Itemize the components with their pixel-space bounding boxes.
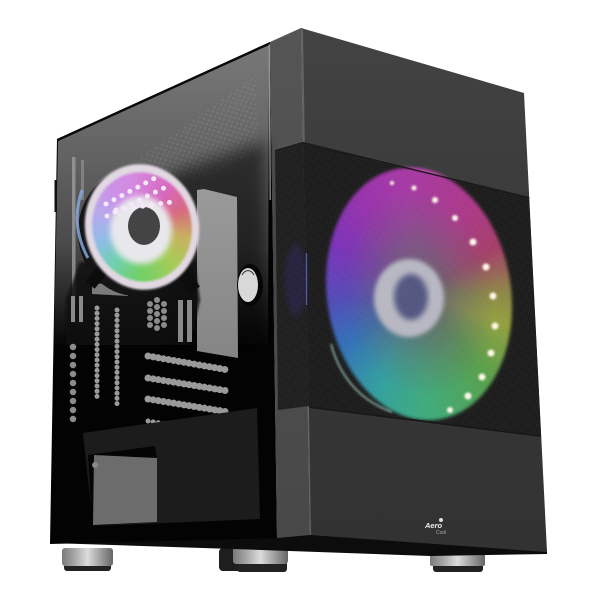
- logo: Aerocool: Aero: [424, 521, 443, 530]
- fan rim highlight: [331, 344, 392, 412]
- mesh texture: [275, 142, 541, 435]
- fan blades colour wheel: [80, 157, 204, 297]
- foot: front left: [62, 548, 113, 571]
- fan: large RGB fan: [315, 150, 525, 435]
- fan hub: [110, 196, 172, 264]
- fan hub ring: [374, 259, 444, 337]
- interior: PSU shroud: [83, 408, 260, 526]
- fan: small RGB fan behind glass: [77, 157, 204, 297]
- fan vent holes: [106, 178, 172, 216]
- side port: [54, 180, 57, 212]
- interior: motherboard tray: [66, 157, 238, 358]
- purple glow on fold: [285, 244, 307, 316]
- honeycomb vent at top: [120, 75, 258, 178]
- fan LED dots: [390, 181, 498, 413]
- foot: front middle: [233, 544, 288, 572]
- logo: Aerocool: Cool: [436, 530, 446, 536]
- interior: expansion slots and vents: [73, 300, 228, 425]
- panel: mesh front intake: [275, 142, 541, 437]
- shade on inner chassis: [165, 140, 268, 345]
- logo: Aerocool: [424, 518, 446, 536]
- fan bracket: [90, 258, 195, 290]
- panel: front of case: [270, 28, 547, 552]
- underside of case: [50, 533, 547, 556]
- panel: glass side: [50, 42, 277, 544]
- foot: right: [430, 552, 485, 572]
- foot: rear: [219, 548, 243, 571]
- interior: cable grommet: [237, 264, 263, 306]
